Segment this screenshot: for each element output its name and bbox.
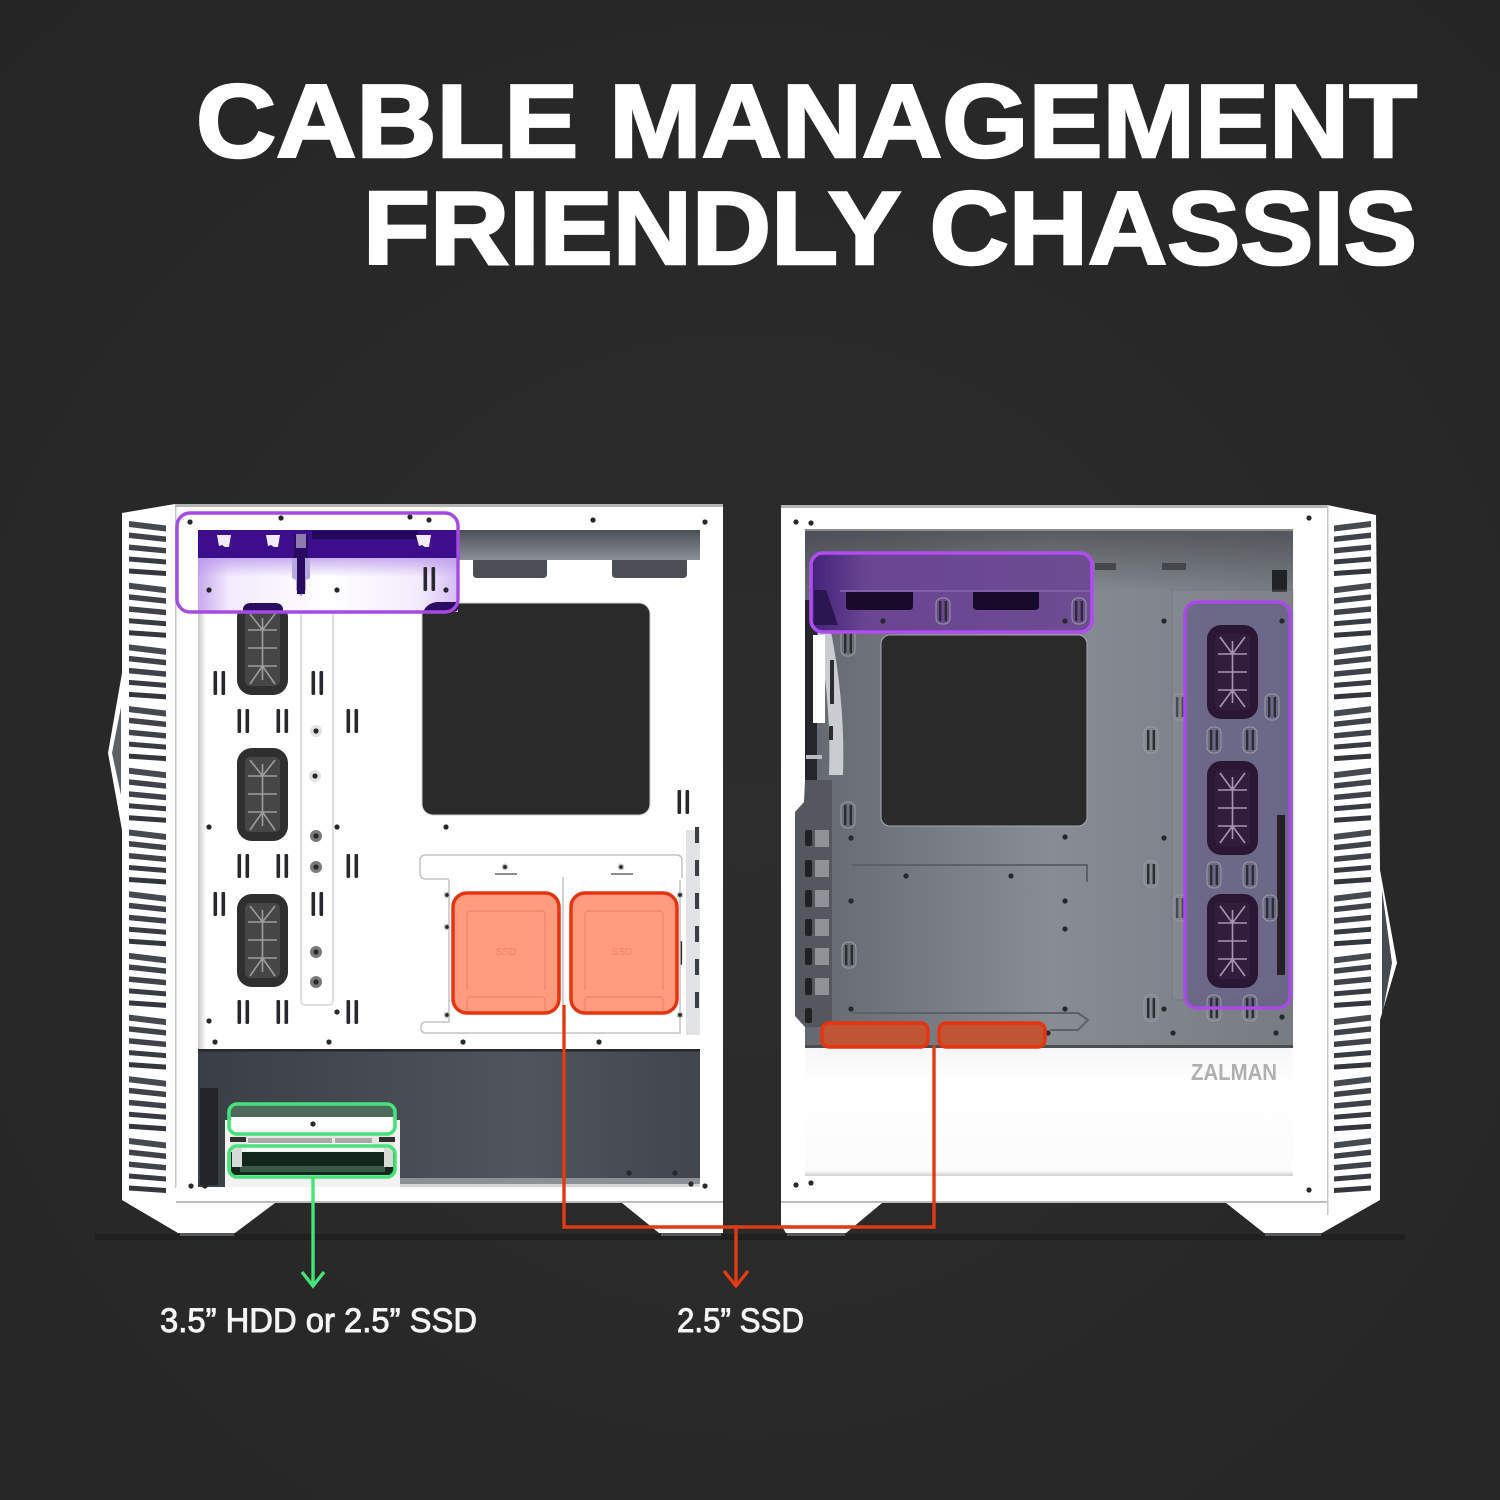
highlight: top cable routing (177, 513, 458, 612)
expansion slots (795, 780, 832, 1027)
PSU shroud cover (805, 1047, 1293, 1176)
cable slots top right (473, 560, 687, 578)
motherboard cut-out (422, 603, 650, 815)
side vent (129, 521, 166, 1193)
mounting pads (186, 1178, 708, 1189)
title (196, 64, 1417, 287)
floor shadow (95, 1234, 1405, 1240)
panel: left chassis (108, 504, 723, 1236)
highlight: SSD bays (453, 893, 677, 1013)
top wall slots (1095, 563, 1287, 592)
right edge strip (686, 827, 700, 1035)
title: CABLE MANAGEMENT (196, 64, 1417, 180)
highlight: HDD bays (229, 1104, 395, 1177)
bottom strip (781, 1176, 1327, 1203)
brand logo: ZALMAN (1191, 1059, 1277, 1085)
SSD bracket plate (420, 855, 683, 1033)
side edge accent (112, 707, 121, 795)
side edge accent (1382, 890, 1392, 1016)
PSU shroud (198, 1051, 700, 1187)
title: FRIENDLY CHASSIS (363, 171, 1417, 287)
highlight: top cable routing (811, 553, 1092, 632)
inner wall (805, 531, 1293, 1048)
top grey recess (458, 530, 700, 560)
label: SSD: 2.5” SSD (677, 1302, 804, 1340)
leader: SSD (564, 1005, 934, 1286)
foot soles (787, 1233, 1321, 1236)
bottom strip (176, 1187, 723, 1203)
foot soles (180, 1233, 721, 1236)
tie-down slots (206, 671, 690, 1045)
chassis body (108, 504, 723, 1233)
right plate (1172, 590, 1293, 1000)
panel: right chassis (781, 505, 1397, 1236)
side vent (1334, 521, 1371, 1193)
cage side bracket (200, 1088, 218, 1185)
fan (805, 600, 843, 780)
vertical bracket (301, 600, 333, 1005)
highlight: right cable routing (1185, 602, 1290, 1021)
corner screws (793, 515, 1312, 1193)
highlight: SSD bays: SSD (612, 947, 632, 958)
motherboard cut-out (881, 635, 1087, 826)
label: HDD: 3.5” HDD or 2.5” SSD (160, 1302, 477, 1340)
highlight: SSD bays: SSD (496, 947, 516, 958)
highlight: SSD bays side view (822, 1023, 1045, 1047)
bottom wall recess (852, 865, 1088, 1030)
leader: HDD (302, 1177, 324, 1286)
wall slots and standoffs (841, 618, 1279, 1036)
HDD cage (225, 1105, 400, 1187)
inner white panel (198, 530, 700, 1052)
chassis body (781, 505, 1397, 1233)
cable grommets (237, 602, 288, 987)
